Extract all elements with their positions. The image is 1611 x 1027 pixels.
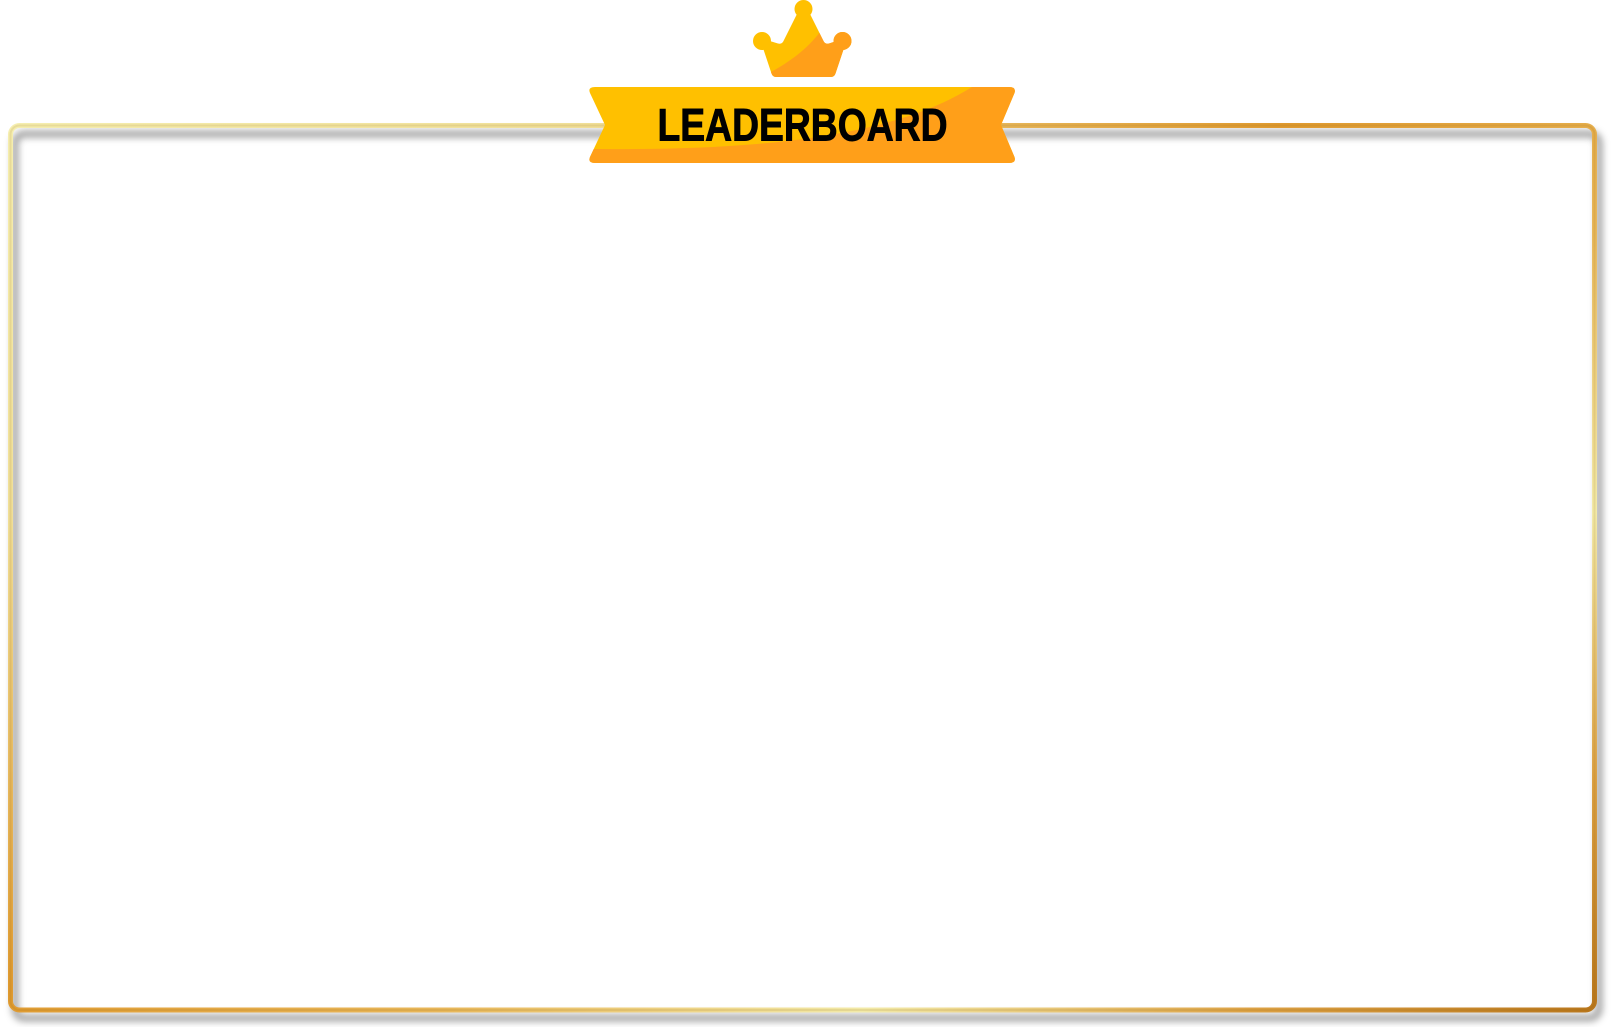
title: LEADERBOARD: [658, 100, 948, 150]
banner: leaderboard ribbon: [589, 87, 1015, 163]
icon: crown: [753, 0, 852, 77]
